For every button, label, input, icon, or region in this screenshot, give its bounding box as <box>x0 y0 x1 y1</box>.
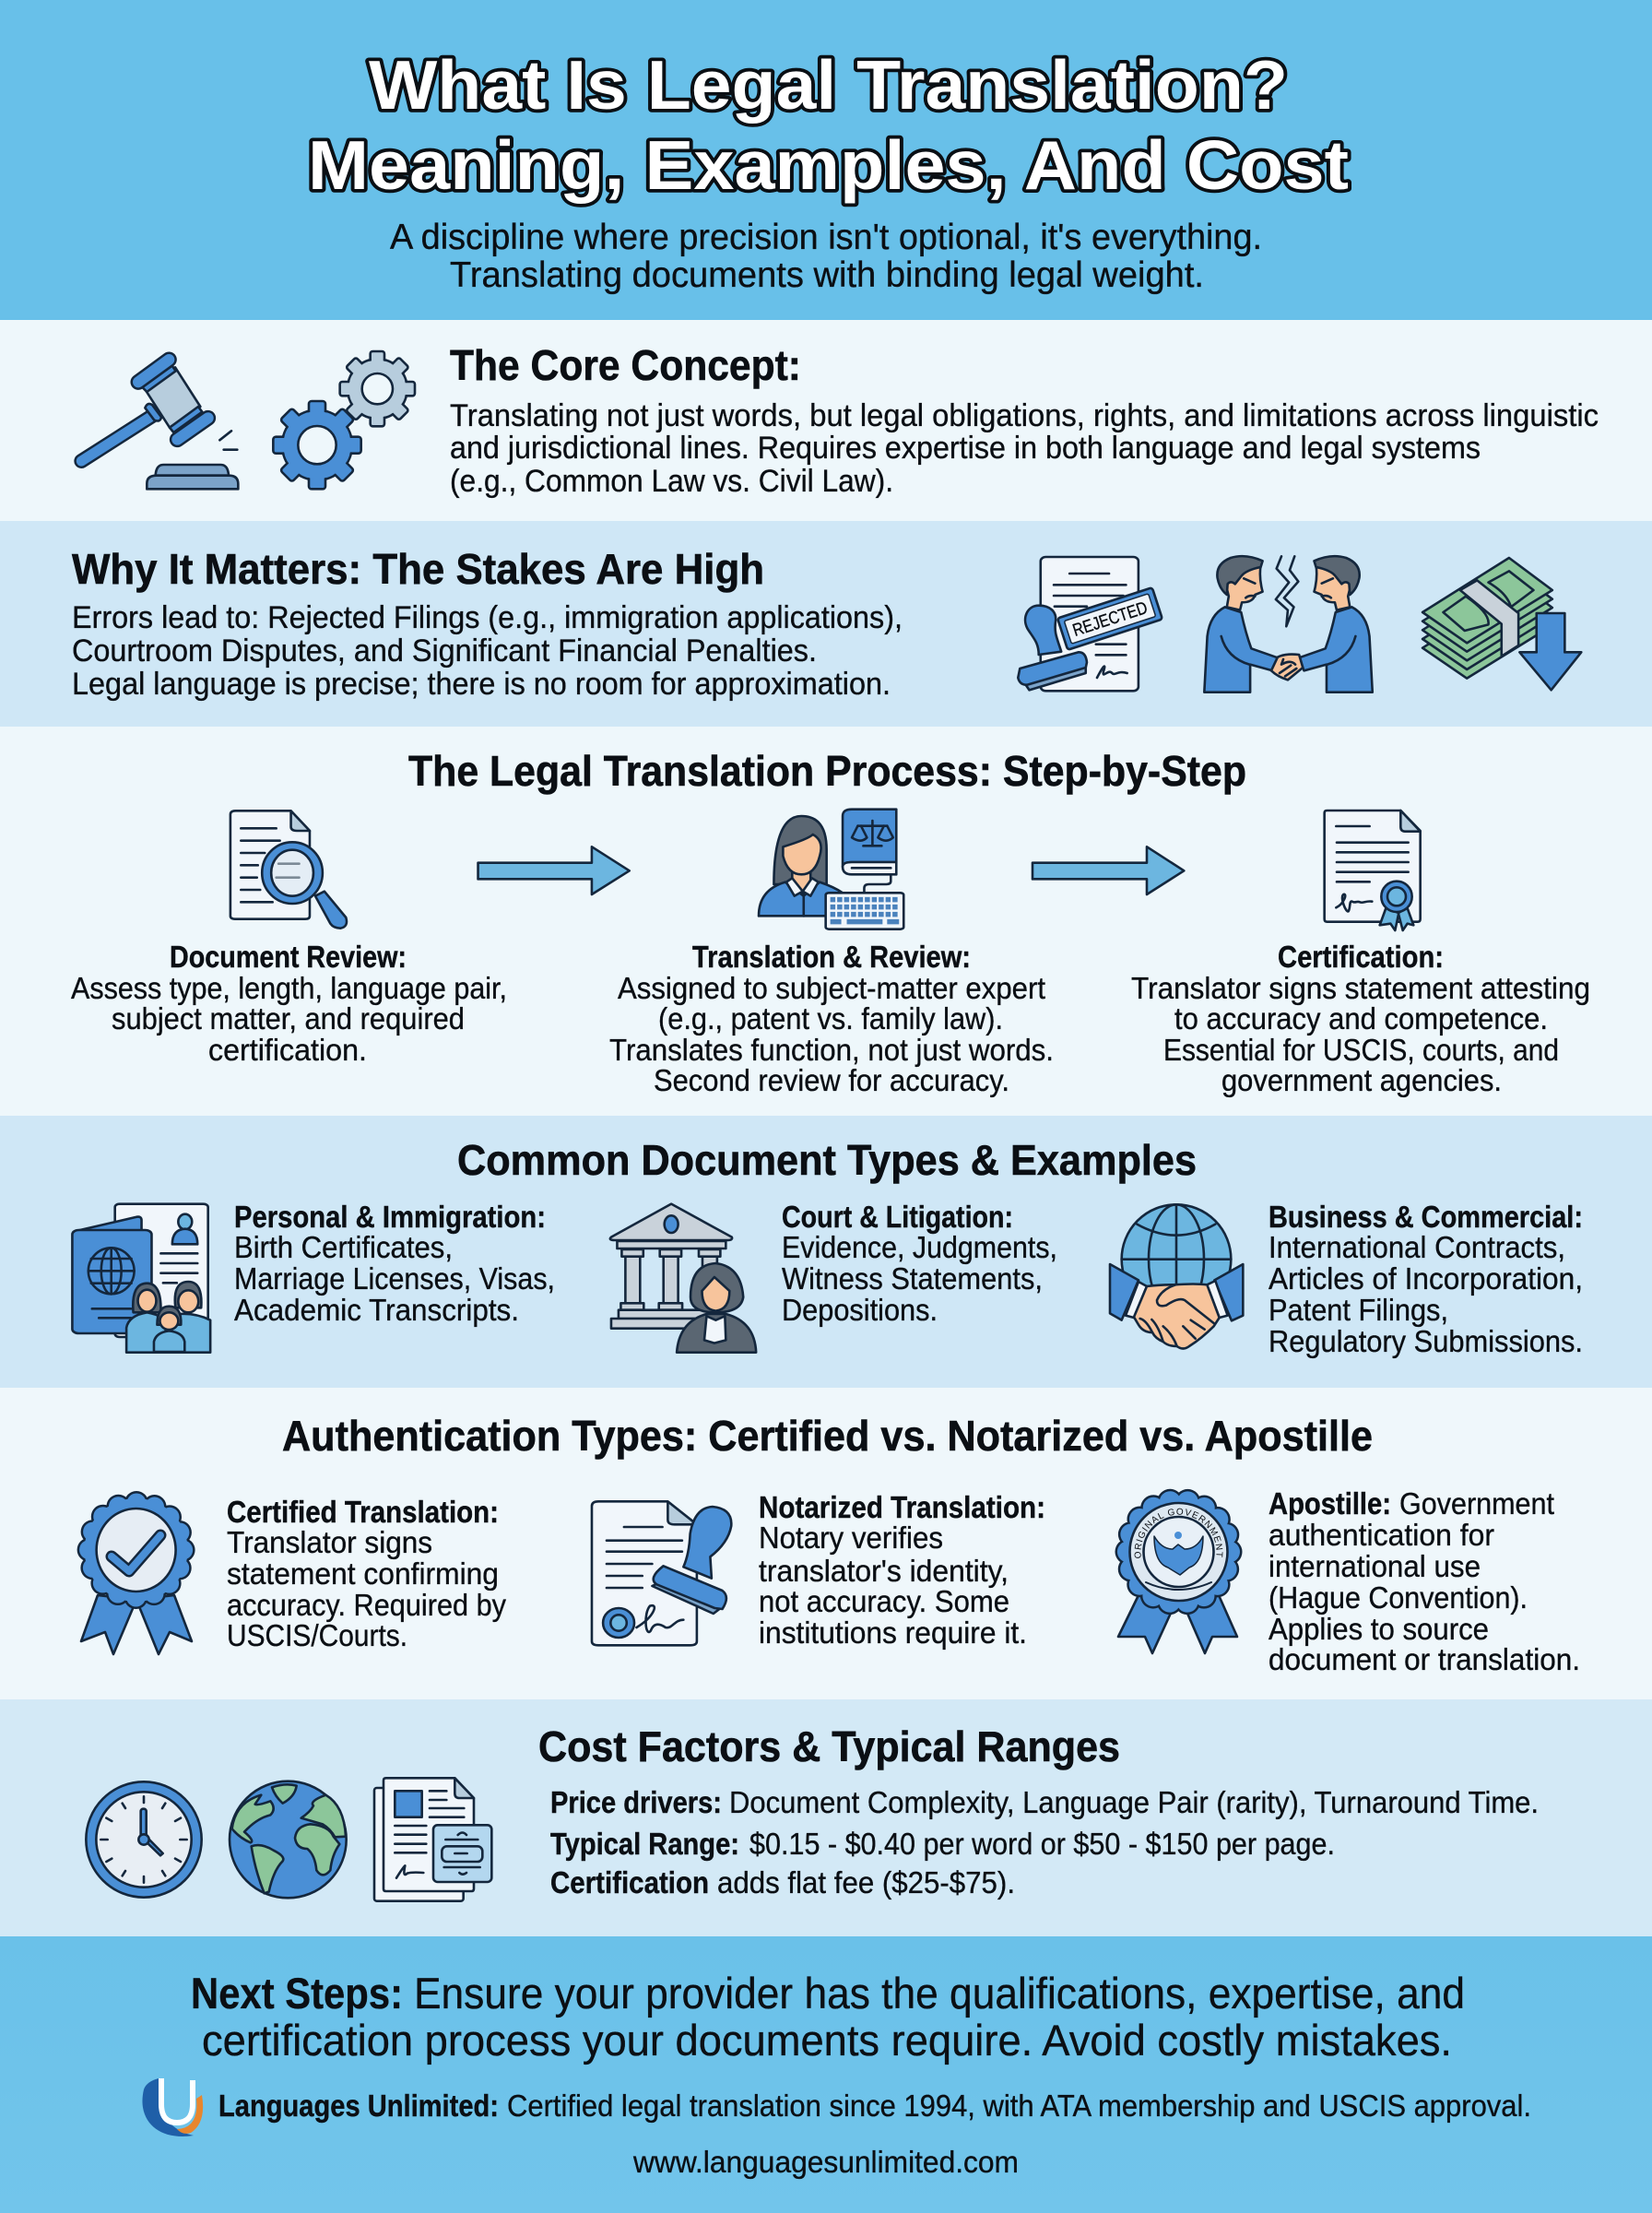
icon: dispute between two men shaking hands <box>1204 556 1373 692</box>
subtitle: Translating documents with binding legal weight. <box>450 255 1204 295</box>
text: next steps: certification process your documents require. Avoid costly mistakes. <box>202 2016 1452 2065</box>
step 3: certification: government agencies. <box>1221 1063 1502 1097</box>
panel: the core concept <box>0 320 1652 521</box>
text: business and commercial: International Contracts, <box>1268 1230 1565 1264</box>
text: apostille <box>1268 1486 1580 1676</box>
heading: document types: Common Document Types & Examples <box>457 1136 1197 1184</box>
text: next steps: Next Steps: <box>191 1969 403 2018</box>
text: personal and immigration: Academic Transcripts. <box>234 1293 519 1327</box>
step 1: document review: subject matter, and required <box>112 1001 465 1035</box>
text: certified translation: USCIS/Courts. <box>227 1618 407 1652</box>
text: next steps: Ensure your provider has the qualifications, expertise, and <box>414 1969 1465 2018</box>
panel: cost factors <box>0 1699 1652 1936</box>
icon: globe <box>230 1781 347 1898</box>
text: court and litigation: Court & Litigation: <box>782 1200 1013 1234</box>
icon: languages unlimited logo <box>142 2078 203 2136</box>
subtitle: A discipline where precision isn't optional, it's everything. <box>390 218 1262 257</box>
step 2: translation and review: Second review for accuracy. <box>654 1063 1009 1097</box>
text: languages unlimited: Certified legal translation since 1994, with ATA membership and USCIS approval. <box>507 2089 1531 2123</box>
step 2: translation and review: Assigned to subject-matter expert <box>618 971 1045 1005</box>
text: court and litigation: Witness Statements, <box>782 1261 1043 1296</box>
heading: cost factors: Cost Factors & Typical Ranges <box>538 1722 1120 1770</box>
icon: rejected document and stamp <box>1018 557 1162 691</box>
icon: clock <box>86 1781 202 1898</box>
icon: documents with card <box>374 1778 491 1901</box>
text: core concept body <box>450 398 1599 499</box>
icon: gavel <box>81 360 238 489</box>
step 2: translation and review <box>609 940 1054 1097</box>
text: certification fee: Certification <box>550 1865 709 1899</box>
text: why it matters body: Errors lead to: Rejected Filings (e.g., immigration applications), <box>72 600 903 635</box>
text: court and litigation: Evidence, Judgments, <box>782 1230 1057 1264</box>
step 1: document review: certification. <box>208 1033 367 1067</box>
text: website url: www.languagesunlimited.com <box>632 2145 1019 2179</box>
text: court and litigation <box>782 1200 1057 1327</box>
subtitle <box>390 218 1262 295</box>
heading: the core concept: The Core Concept: <box>450 341 801 389</box>
step 3: certification: Certification: <box>1278 940 1444 974</box>
text: personal and immigration <box>234 1200 555 1327</box>
icon: rejected document and stamp: REJECTED <box>1070 598 1150 641</box>
text: business and commercial: Business & Commercial: <box>1268 1200 1583 1234</box>
text: apostille: Apostille: <box>1268 1486 1391 1521</box>
text: apostille: document or translation. <box>1268 1642 1580 1676</box>
text: apostille: authentication for <box>1268 1518 1494 1552</box>
icon: passport and family <box>72 1204 210 1353</box>
arrow: review to translation <box>478 846 630 894</box>
text: price drivers: Document Complexity, Language Pair (rarity), Turnaround Time. <box>729 1785 1539 1819</box>
text: personal and immigration: Marriage Licenses, Visas, <box>234 1261 555 1296</box>
text: apostille: international use <box>1268 1549 1481 1583</box>
icon: certified rosette with check mark <box>81 1498 192 1654</box>
text: business and commercial: Regulatory Submissions. <box>1268 1324 1583 1358</box>
icon: notarized document with stamp <box>592 1501 731 1645</box>
text: languages unlimited: Languages Unlimited: <box>218 2089 499 2123</box>
panel: footer <box>0 1936 1652 2213</box>
heading: process: The Legal Translation Process: Step-by-Step <box>408 747 1246 795</box>
step 3: certification <box>1131 940 1590 1097</box>
step 3: certification: to accuracy and competence. <box>1174 1001 1548 1035</box>
text: court and litigation: Depositions. <box>782 1293 938 1327</box>
text: certified translation: Certified Translation: <box>227 1495 499 1529</box>
text: notarized translation: Notarized Translation: <box>759 1490 1045 1524</box>
panel: process <box>0 727 1652 1116</box>
text: business and commercial: Articles of Incorporation, <box>1268 1261 1583 1296</box>
text: business and commercial <box>1268 1200 1583 1358</box>
step 3: certification: Translator signs statement attesting <box>1131 971 1590 1005</box>
panel: header <box>0 0 1652 320</box>
icon: courthouse and judge <box>610 1204 756 1353</box>
step 2: translation and review: Translates function, not just words. <box>609 1033 1054 1067</box>
step 1: document review: Assess type, length, language pair, <box>71 971 507 1005</box>
text: notarized translation: Notary verifies <box>759 1521 943 1555</box>
text: core concept body: Translating not just words, but legal obligations, rights, and limitations across linguistic <box>450 398 1599 433</box>
text: business and commercial: Patent Filings, <box>1268 1293 1448 1327</box>
text: notarized translation <box>759 1490 1045 1650</box>
panel: document types <box>0 1116 1652 1388</box>
text: notarized translation: institutions require it. <box>759 1615 1027 1650</box>
title: What Is Legal Translation? <box>369 46 1288 124</box>
text: apostille: Applies to source <box>1268 1612 1489 1646</box>
icon: apostille government seal: ORIGINAL GOVERNMENT SEAL <box>1134 1509 1222 1558</box>
arrow: translation to certification <box>1032 846 1184 894</box>
text: apostille: (Hague Convention). <box>1268 1580 1528 1615</box>
text: price drivers: Price drivers: <box>550 1785 722 1819</box>
text: personal and immigration: Personal & Immigration: <box>234 1200 546 1234</box>
heading: why it matters: Why It Matters: The Stakes Are High <box>72 545 764 593</box>
title <box>308 46 1349 204</box>
step 2: translation and review: (e.g., patent vs. family law). <box>658 1001 1003 1035</box>
icon: money stack with down arrow <box>1422 558 1581 690</box>
text: why it matters body: Legal language is precise; there is no room for approximation. <box>72 667 891 702</box>
text: next steps <box>191 1969 1465 2065</box>
icon: signed certificate with rosette <box>1325 811 1421 930</box>
text: why it matters body <box>72 600 903 702</box>
text: certification fee <box>550 1865 1015 1899</box>
text: certified translation: Translator signs <box>227 1525 432 1559</box>
text: why it matters body: Courtroom Disputes, and Significant Financial Penalties. <box>72 633 817 669</box>
step 3: certification: Essential for USCIS, courts, and <box>1163 1033 1559 1067</box>
text: certified translation: statement confirming <box>227 1556 499 1591</box>
title: Meaning, Examples, And Cost <box>308 126 1349 204</box>
icon: document with magnifying glass <box>230 811 347 929</box>
icon: apostille government seal <box>1115 1488 1243 1654</box>
text: core concept body: (e.g., Common Law vs. Civil Law). <box>450 464 893 499</box>
heading: authentication types: Authentication Types: Certified vs. Notarized vs. Apostille <box>282 1412 1373 1460</box>
step 1: document review <box>71 940 507 1067</box>
text: typical range: Typical Range: <box>550 1827 739 1861</box>
panel: why it matters <box>0 521 1652 727</box>
text: certification fee: adds flat fee ($25-$75). <box>717 1865 1015 1899</box>
icon: gears <box>273 351 415 489</box>
text: personal and immigration: Birth Certificates, <box>234 1230 453 1264</box>
text: apostille: Government <box>1399 1486 1554 1521</box>
text: core concept body: and jurisdictional lines. Requires expertise in both language and legal systems <box>450 431 1481 466</box>
text: certified translation: accuracy. Required by <box>227 1588 506 1622</box>
text: typical range: $0.15 - $0.40 per word or $50 - $150 per page. <box>749 1827 1335 1861</box>
text: certified translation <box>227 1495 506 1652</box>
step 1: document review: Document Review: <box>170 940 407 974</box>
text: notarized translation: translator's identity, <box>759 1554 1009 1588</box>
icon: globe and handshake <box>1110 1204 1243 1348</box>
panel: authentication types <box>77 1412 1580 1676</box>
text: notarized translation: not accuracy. Some <box>759 1584 1009 1618</box>
icon: translator with law book and keyboard <box>759 810 903 929</box>
step 2: translation and review: Translation & Review: <box>692 940 971 974</box>
